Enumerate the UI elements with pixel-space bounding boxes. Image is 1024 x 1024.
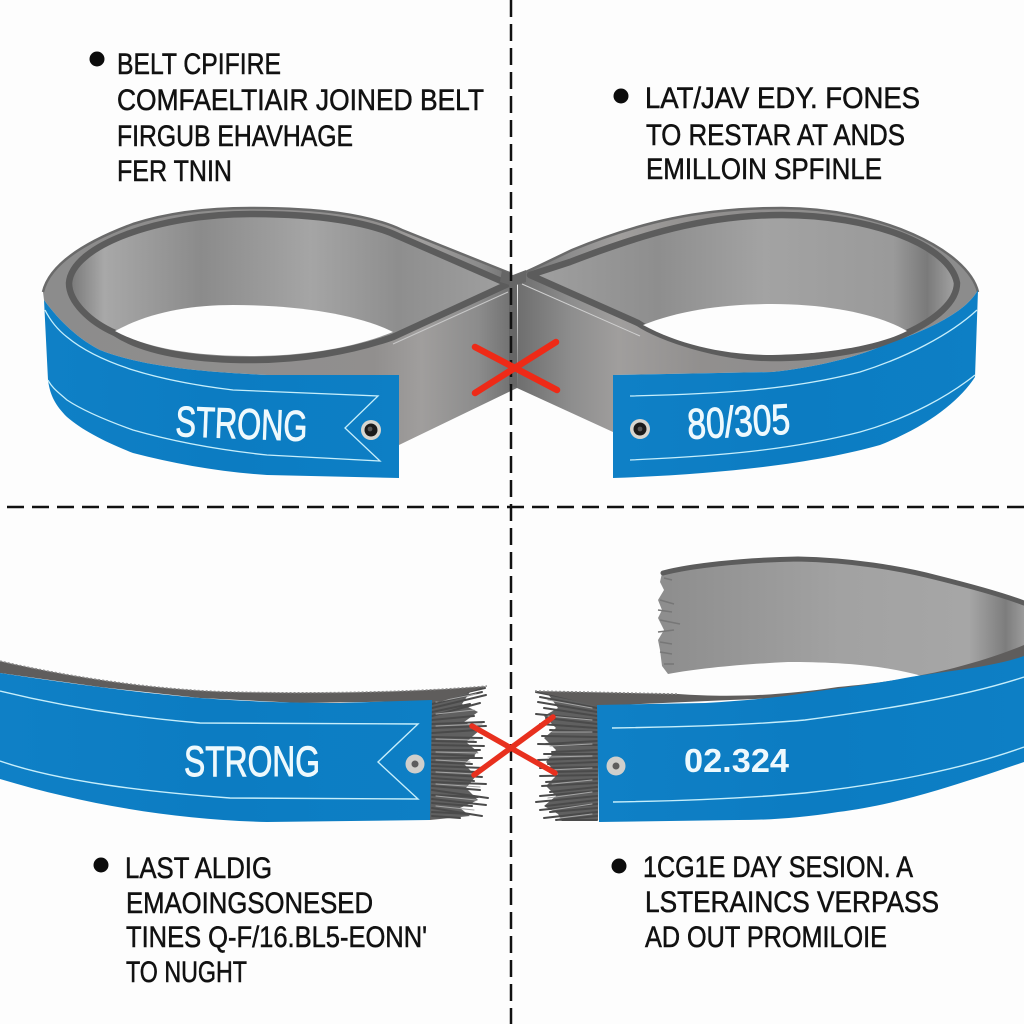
highlight under the joint edge: [522, 284, 640, 336]
text block: top-right bullet: EMILLOIN SPFINLE: [646, 153, 882, 186]
highlight under the joint edge: [393, 292, 508, 344]
icon: rivet: [361, 420, 381, 440]
text block: top-right bullet: LAT/JAV EDY. FONES: [645, 82, 920, 115]
inner wall of the open belt: [658, 559, 1024, 676]
joint seam at the crossing: [500, 270, 526, 388]
opening through the loop: [643, 304, 907, 355]
blue ribbon face: [44, 300, 399, 478]
text block: top-left bullet: COMFAELTIAIR JOINED BELT: [117, 84, 484, 117]
text block: bottom-left bullet: TINES Q-F/16.BL5-EONN': [126, 921, 427, 954]
blue ribbon face: [597, 656, 1024, 822]
belt rim and strap surface: [517, 208, 978, 432]
top rim of the wall: [663, 559, 1024, 603]
text block: bottom-right bullet: AD OUT PROMILOIE: [645, 921, 887, 954]
text block: top-left bullet: BELT CPIFIRE: [117, 48, 281, 81]
belt rim and strap surface: [43, 208, 517, 445]
text block: bottom-right bullet: 1CG1E DAY SESION. A: [643, 851, 913, 884]
ribbon label: 80/305: [686, 396, 791, 449]
ribbon label: STRONG: [184, 738, 320, 786]
horizontal dashed divider: [7, 506, 1024, 508]
icon: red cross at top joint: [475, 342, 557, 393]
text block: bottom-right bullet: [612, 851, 939, 954]
text block: top-right bullet: TO RESTAR AT ANDS: [646, 119, 905, 152]
ribbon pinstripes: [612, 677, 1024, 728]
text block: top-right bullet: [614, 82, 920, 186]
opening through the loop: [115, 305, 393, 356]
ribbon pinstripes with swallowtail notch: [0, 691, 418, 799]
icon: rivet: [406, 754, 424, 774]
icon: red cross at bottom break: [472, 717, 555, 775]
inner wall of the belt loop: [530, 215, 957, 358]
icon: rivet: [630, 419, 650, 439]
text block: bottom-left bullet: EMAOINGSONESED: [126, 887, 373, 920]
ribbon pinstripes with swallowtail notch: [45, 310, 380, 461]
text block: top-left bullet: FIRGUB EHAVHAGE: [117, 120, 353, 153]
panel: top-right joined belt loop: [517, 208, 978, 478]
text block: top-left bullet: [90, 48, 484, 188]
text block: bottom-left bullet: TO NUGHT: [126, 956, 247, 989]
text block: bottom-right bullet: LSTERAINCS VERPASS: [645, 886, 939, 919]
text block: bottom-left bullet: [94, 852, 427, 989]
rim along the belt top edge: [535, 645, 1024, 706]
frayed belt fibres: [536, 692, 598, 820]
panel: bottom-left frayed belt: [0, 661, 488, 822]
inner wall of the belt loop: [69, 214, 508, 360]
torn wall edge: [658, 578, 680, 664]
ribbon label: STRONG: [175, 398, 308, 451]
blue ribbon face: [613, 290, 978, 478]
rim along the belt top edge: [0, 661, 487, 703]
frayed belt fibres: [430, 688, 488, 820]
panel: bottom-right frayed belt: [535, 559, 1024, 822]
ribbon label: 02.324: [684, 742, 790, 779]
text block: top-left bullet: FER TNIN: [117, 155, 232, 188]
text block: bottom-left bullet: LAST ALDIG: [125, 852, 272, 885]
vertical dashed divider: [510, 0, 512, 1024]
ribbon pinstripes: [630, 310, 977, 396]
blue ribbon face: [0, 673, 432, 822]
panel: top-left joined belt loop: [43, 208, 517, 478]
icon: rivet: [606, 756, 626, 776]
